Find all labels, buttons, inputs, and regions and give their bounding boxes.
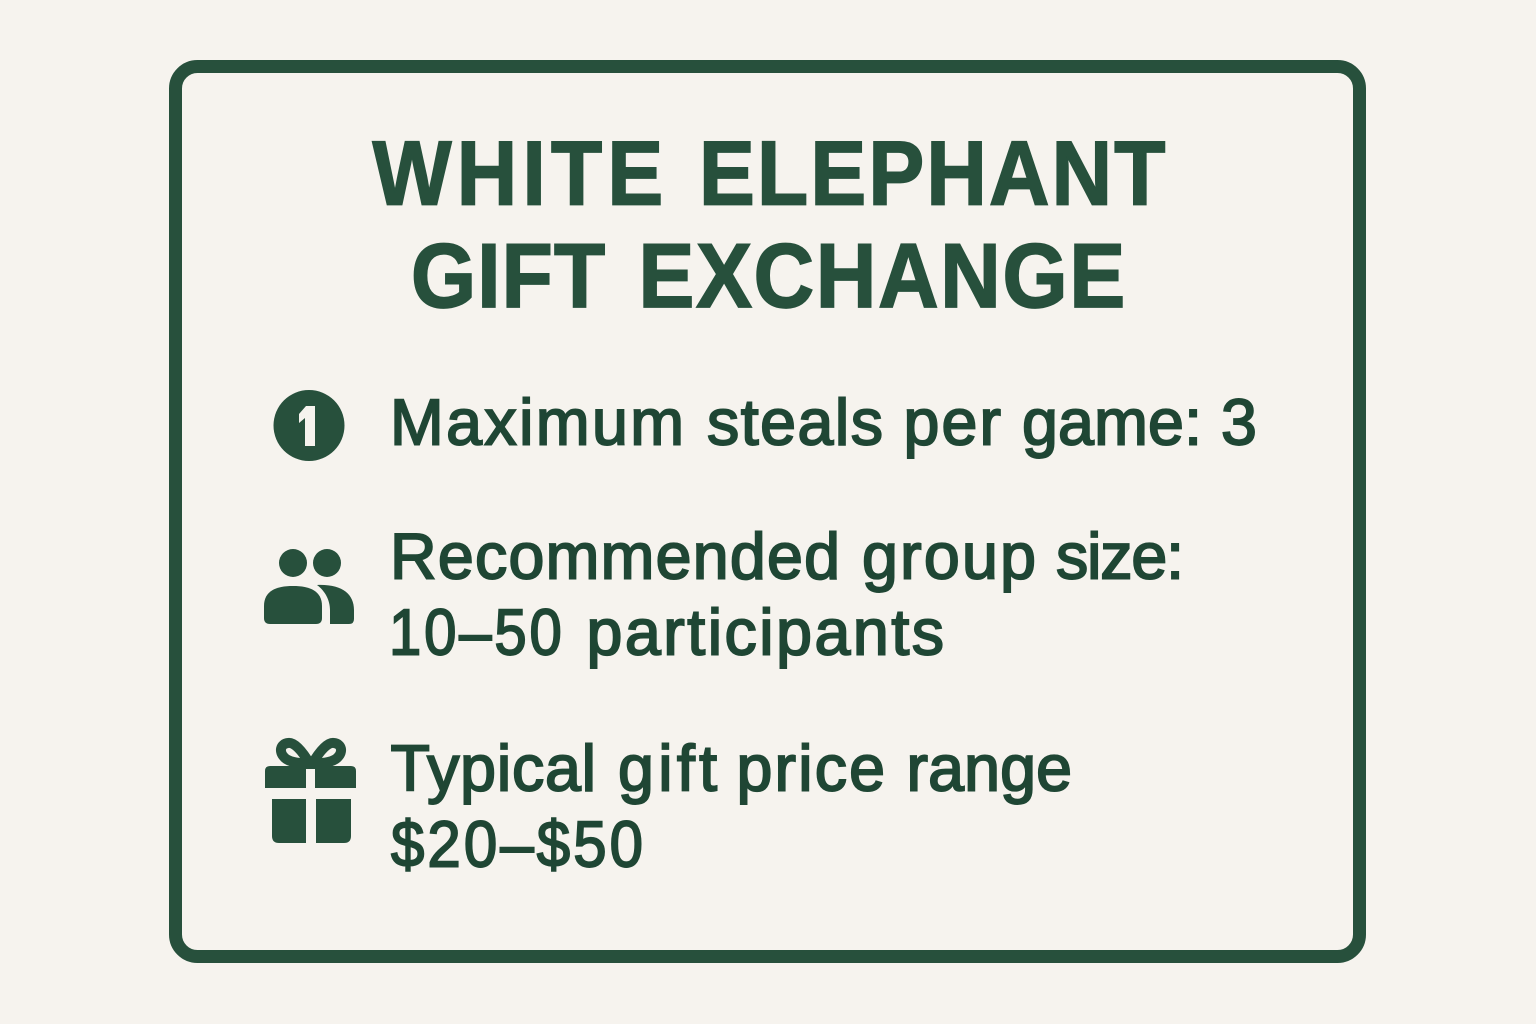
text: typical gift price range: range	[906, 732, 1072, 804]
text: maximum steals: steals	[707, 386, 883, 458]
title: WHITE	[372, 122, 663, 224]
icon: two people	[264, 549, 354, 624]
text: recommended group size	[389, 520, 1184, 669]
text: recommended group size: 10–50	[389, 597, 562, 669]
text: recommended group size: size:	[1056, 520, 1184, 592]
text: maximum steals	[390, 386, 1257, 458]
text: typical gift price range: Typical	[390, 732, 596, 804]
panel: rounded frame	[176, 66, 1360, 956]
title: GIFT	[411, 225, 605, 327]
title: EXCHANGE	[638, 225, 1125, 327]
text: maximum steals: Maximum	[390, 386, 684, 458]
title	[372, 122, 1165, 327]
text: typical gift price range: gift	[618, 732, 717, 804]
text: maximum steals: 3	[1221, 386, 1257, 458]
text: typical gift price range	[390, 732, 1072, 881]
text: typical gift price range: price	[736, 732, 885, 804]
icon: gift box	[265, 743, 356, 843]
icon: number one badge	[274, 390, 344, 461]
text: maximum steals: per	[904, 386, 1001, 458]
text: typical gift price range: $20–$50	[391, 810, 643, 881]
text: maximum steals: game:	[1022, 386, 1202, 458]
text: recommended group size: group	[862, 520, 1036, 592]
title: ELEPHANT	[699, 122, 1165, 224]
text: recommended group size: Recommended	[390, 520, 840, 592]
text: recommended group size: participants	[586, 596, 944, 668]
